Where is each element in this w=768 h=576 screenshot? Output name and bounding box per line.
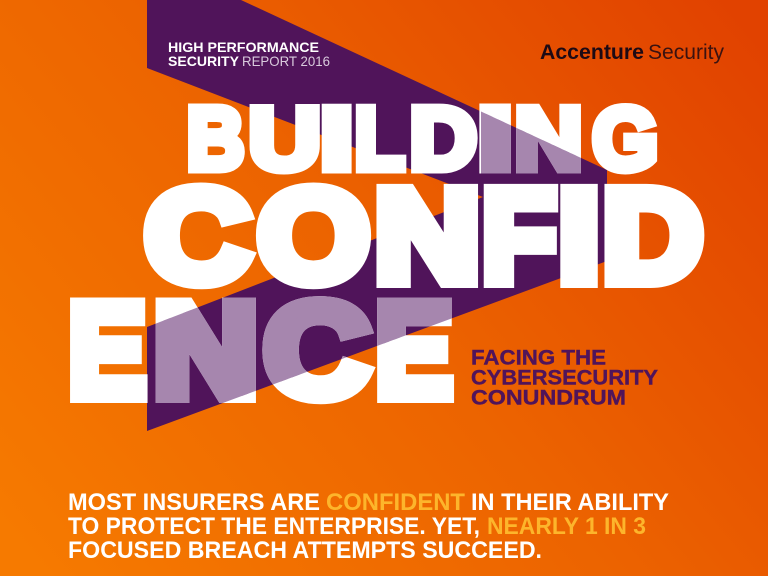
title: BUILDING: D [410,89,477,188]
bottom statement: CONFIDENT [326,489,465,516]
report label: REPORT 2016 [242,53,330,69]
title: BUILDING: I [477,89,513,188]
title: BUILDING: G [592,89,658,188]
bottom statement: MOST INSURERS ARE [68,489,320,516]
purple chevron shape [147,0,607,431]
title: BUILDING: G [592,89,658,188]
title: ENCE: N [154,277,258,425]
subtitle: CYBERSECURITY [471,366,658,390]
title: CONFID: O [258,162,370,309]
title: ENCE: E [376,277,452,425]
title: BUILDING: N [515,89,583,188]
subtitle: FACING THE [471,346,606,370]
Accenture Security logo: Security [648,41,724,64]
Accenture Security logo: Accenture [540,41,644,64]
report label: HIGH PERFORMANCE [168,39,319,55]
bottom statement: FOCUSED BREACH ATTEMPTS SUCCEED. [68,537,542,564]
title: BUILDING: N [515,89,583,188]
Accenture Security logo [540,41,724,64]
bottom statement: TO PROTECT THE ENTERPRISE. YET, [68,513,480,540]
title: ENCE: C [264,277,370,425]
title: ENCE: E [68,277,146,425]
title: CONFID: F [482,162,556,309]
title: CONFID: N [374,162,480,309]
title: BUILDING: U [249,89,321,188]
title: BUILDING: L [354,89,405,188]
title: CONFID: I [558,162,600,309]
bottom statement: NEARLY 1 IN 3 [487,513,646,540]
bottom statement: IN THEIR ABILITY [471,489,669,516]
title: BUILDING: B [187,89,244,188]
title: ENCE: N [154,277,258,425]
title: BUILDING: I [477,89,513,188]
title: CONFID: C [145,162,251,309]
title: ENCE: C [264,277,370,425]
title: BUILDING: I [320,89,354,188]
title: BUILDING [188,103,658,174]
title: CONFID: D [603,162,703,309]
title: ENCE [70,296,454,404]
bottom statement [68,489,669,564]
title: ENCE: E [376,277,452,425]
subtitle: CONUNDRUM [471,386,626,410]
subtitle [471,346,658,410]
report label: SECURITY [168,53,240,69]
report label [168,39,330,69]
